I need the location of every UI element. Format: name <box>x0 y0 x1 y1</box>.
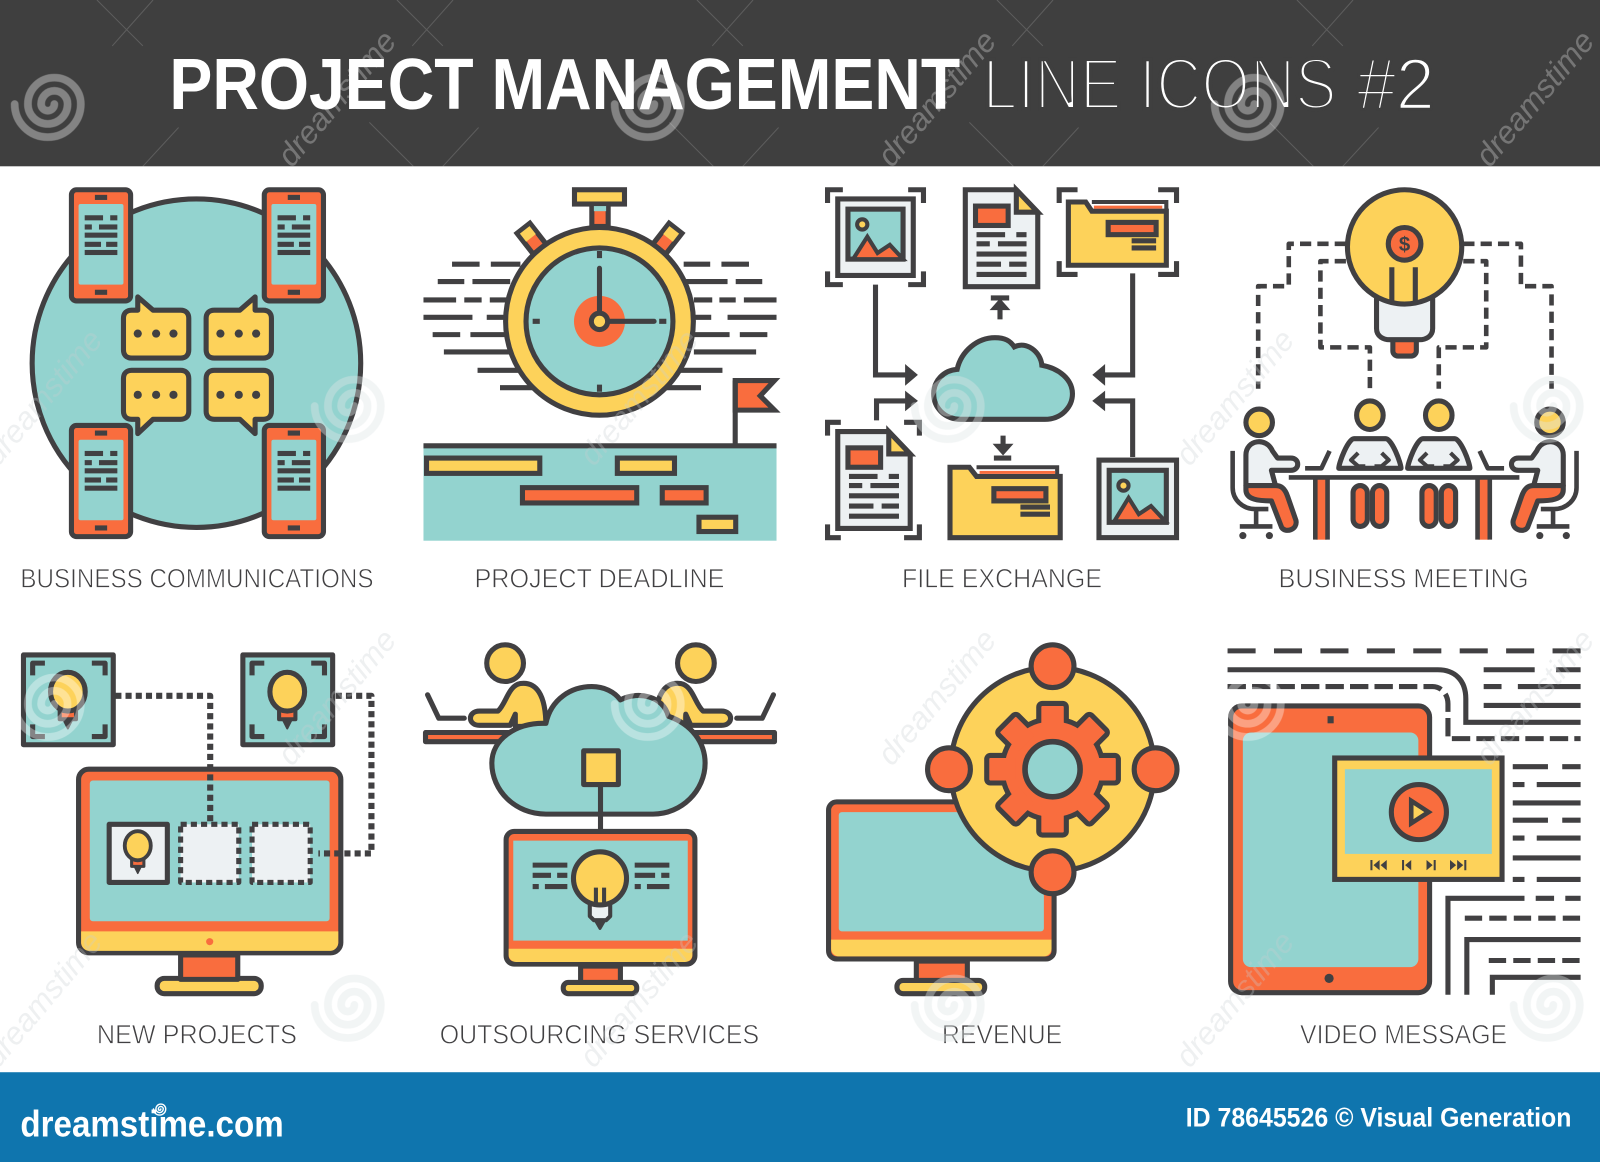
idea bulb <box>573 852 627 928</box>
flag <box>735 381 774 445</box>
light bulb <box>1347 190 1462 356</box>
cloud node <box>584 751 618 830</box>
footer logo: dreamstime.com <box>20 1103 284 1144</box>
person right <box>655 645 773 726</box>
document top <box>965 190 1038 287</box>
monitor <box>506 831 695 994</box>
bottom lines <box>1448 898 1581 995</box>
folder bottom <box>950 467 1060 538</box>
watermark text: dreamstime <box>572 322 705 472</box>
video player <box>1335 758 1502 879</box>
right lines <box>1513 767 1581 879</box>
panel: project deadline <box>423 190 777 541</box>
idea box right <box>243 655 333 745</box>
chat bubbles <box>123 297 271 434</box>
phones <box>71 190 323 537</box>
picture file top left <box>828 190 923 285</box>
person left <box>428 645 546 726</box>
title: number: #2 <box>1357 44 1435 125</box>
watermark text: dreamstime <box>1468 23 1600 173</box>
gantt chart <box>423 445 777 541</box>
satellites <box>928 645 1177 894</box>
yellow circle <box>951 667 1155 871</box>
footer bar <box>0 1072 1600 1162</box>
panel: outsourcing services <box>426 645 774 994</box>
monitor <box>79 769 341 994</box>
arrow down <box>994 436 1011 458</box>
panel: new projects <box>23 655 371 994</box>
dotted connectors <box>115 696 371 853</box>
arrow up <box>991 298 1009 319</box>
cloud <box>934 338 1072 419</box>
picture file bottom right <box>1099 460 1177 538</box>
watermark text: dreamstime <box>870 23 1003 173</box>
watermark text: dreamstime <box>1168 924 1301 1074</box>
people right <box>1480 409 1577 539</box>
tablet <box>1231 706 1430 993</box>
panel: business meeting <box>1233 190 1577 540</box>
footer credit: ID 78645526 © Visual Generation <box>1186 1102 1571 1132</box>
table <box>1289 477 1519 540</box>
header bar <box>0 0 1600 166</box>
watermark text: dreamstime <box>270 23 403 173</box>
dashed connectors <box>1258 244 1552 389</box>
label: business communications: BUSINESS COMMUNICATIONS <box>20 564 373 594</box>
watermark text: dreamstime <box>270 622 403 772</box>
label: outsourcing services: OUTSOURCING SERVICES <box>440 1020 759 1050</box>
panel: video message <box>1228 651 1581 995</box>
monitor <box>829 802 1054 994</box>
people left <box>1233 409 1330 539</box>
title: bold part: PROJECT MANAGEMENT <box>169 44 960 125</box>
stopwatch <box>506 190 693 415</box>
panel: file exchange <box>828 190 1177 538</box>
label: video message: VIDEO MESSAGE <box>1300 1020 1507 1050</box>
label: new projects: NEW PROJECTS <box>97 1020 297 1050</box>
panel: business communications <box>32 190 361 537</box>
panel: revenue <box>829 645 1177 994</box>
folder top right <box>1059 190 1177 274</box>
speed lines <box>423 264 777 388</box>
table <box>426 732 774 742</box>
teal circle <box>32 199 361 527</box>
gear <box>989 706 1116 832</box>
light bulb: $ <box>1399 234 1411 256</box>
text lines <box>533 865 669 887</box>
label: project deadline: PROJECT DEADLINE <box>474 564 724 594</box>
title: light part: LINE ICONS <box>983 44 1337 125</box>
people centre <box>1339 401 1470 526</box>
cloud <box>492 687 705 814</box>
idea box left <box>23 655 113 745</box>
label: business meeting: BUSINESS MEETING <box>1279 564 1529 594</box>
watermark text: dreamstime <box>1468 622 1600 772</box>
connectors <box>876 273 1133 457</box>
top lines <box>1228 651 1581 739</box>
document bottom left <box>828 422 919 538</box>
label: revenue: REVENUE <box>942 1020 1062 1050</box>
label: file exchange: FILE EXCHANGE <box>902 564 1102 594</box>
watermark text: dreamstime <box>1168 322 1301 472</box>
project cards <box>109 824 167 882</box>
watermark text: dreamstime <box>572 924 705 1074</box>
watermark text: dreamstime <box>870 622 1003 772</box>
